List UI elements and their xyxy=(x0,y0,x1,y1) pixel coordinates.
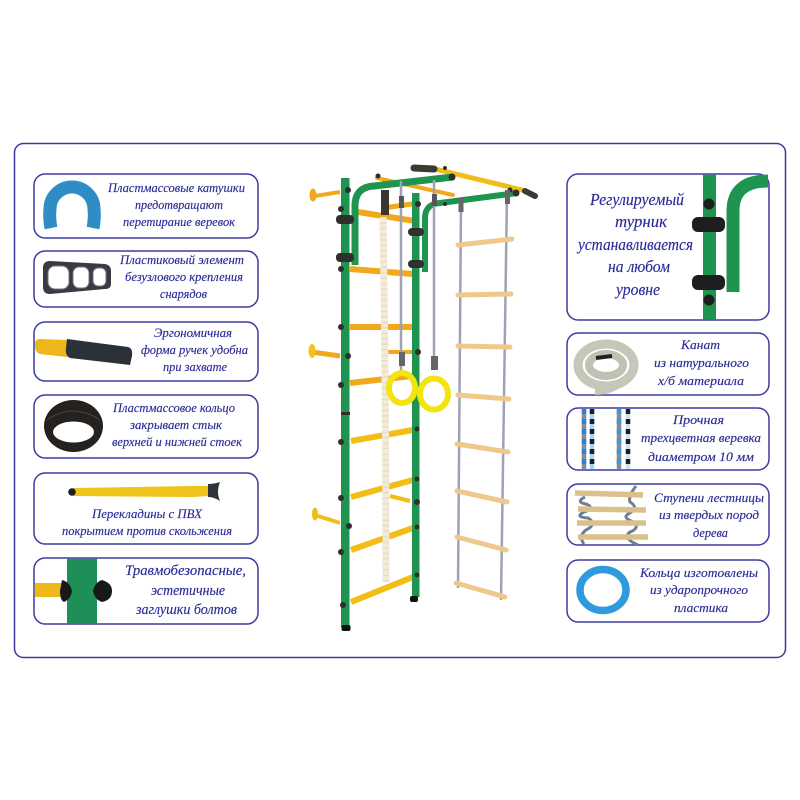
bolts and clamps xyxy=(336,166,520,608)
rungs xyxy=(350,212,415,602)
text: three-colour cord: Прочная xyxy=(672,412,724,427)
text: knotless fastening: безузлового крепления xyxy=(125,269,243,284)
panel: impact-resistant rings xyxy=(567,560,769,622)
text: joint ring: закрывает стык xyxy=(129,417,223,432)
outer frame xyxy=(14,144,786,658)
main illustration: wall bars xyxy=(308,166,535,631)
panel: adjustable pull-up bar xyxy=(567,174,769,320)
text: ergonomic handles: при захвате xyxy=(163,359,227,374)
text: hardwood steps: из твердых пород xyxy=(659,507,759,522)
text: impact-resistant rings: из ударопрочного xyxy=(650,582,748,597)
text: ergonomic handles: Эргономичная xyxy=(154,325,232,340)
text: hardwood steps: дерева xyxy=(693,525,728,540)
text: cotton rope: х/б материала xyxy=(657,373,745,388)
text: adjustable pull-up bar: Регулируемый xyxy=(589,190,684,209)
panel: knotless fastening element xyxy=(34,251,258,307)
icon: green post with bolt caps xyxy=(35,559,112,623)
upper yellow bars xyxy=(377,168,535,207)
panel: plastic spools xyxy=(34,174,258,238)
icon: green post with bracket and clamps xyxy=(692,175,768,319)
icon: braided cords xyxy=(584,409,628,469)
text: impact-resistant rings: Кольца изготовлены xyxy=(639,565,758,580)
text: bolt caps: эстетичные xyxy=(151,583,225,599)
panel: cotton rope xyxy=(567,333,769,395)
text: impact-resistant rings: пластика xyxy=(674,600,729,615)
panel: bolt caps xyxy=(34,558,258,624)
panel: three-colour cord xyxy=(567,408,769,470)
wall pegs xyxy=(308,188,340,523)
text: cotton rope: из натурального xyxy=(654,355,750,370)
text: three-colour cord: диаметром 10 мм xyxy=(648,449,754,464)
text: ergonomic handles: форма ручек удобна xyxy=(141,342,248,357)
icon: blue ring xyxy=(580,570,626,610)
icon: three-hole plastic element xyxy=(43,261,111,294)
text: plastic spools: Пластмассовые катушки xyxy=(107,180,245,195)
text: plastic spools: перетирание веревок xyxy=(123,214,236,229)
gymnastic rings xyxy=(389,180,448,410)
text: knotless fastening: Пластиковый элемент xyxy=(119,252,244,267)
green posts and pull-up brackets xyxy=(341,177,517,627)
icon: coiled rope xyxy=(578,344,634,392)
icon: black plastic ring xyxy=(44,400,103,452)
icon: black handle on yellow tube xyxy=(35,339,132,365)
text: adjustable pull-up bar: устанавливается xyxy=(576,235,693,254)
text: adjustable pull-up bar: на любом xyxy=(608,257,670,276)
text: bolt caps: Травмобезопасные, xyxy=(125,563,246,579)
panel: plastic joint ring xyxy=(34,395,258,458)
text: adjustable pull-up bar: турник xyxy=(615,212,668,231)
text: PVC rungs: покрытием против скольжения xyxy=(62,523,232,538)
icon: blue spool xyxy=(50,187,94,228)
text: joint ring: верхней и нижней стоек xyxy=(112,434,243,449)
text: PVC rungs: Перекладины с ПВХ xyxy=(91,506,203,521)
climbing rope xyxy=(381,190,389,582)
text: three-colour cord: трехцветная веревка xyxy=(641,430,762,445)
icon: ladder steps xyxy=(575,486,648,545)
text: bolt caps: заглушки болтов xyxy=(135,602,237,618)
icon: yellow crossbar xyxy=(68,482,220,501)
panel: PVC coated rungs xyxy=(34,473,258,544)
text: hardwood steps: Ступени лестницы xyxy=(654,490,764,505)
post caps xyxy=(342,596,418,631)
text: cotton rope: Канат xyxy=(680,337,720,352)
rope ladder xyxy=(456,190,512,600)
text: adjustable pull-up bar: уровне xyxy=(614,280,660,299)
text: plastic spools: предотвращают xyxy=(135,197,223,212)
text: joint ring: Пластмассовое кольцо xyxy=(112,400,235,415)
panel: hardwood ladder steps xyxy=(567,484,769,545)
panel: ergonomic handles xyxy=(34,322,258,381)
text: knotless fastening: снарядов xyxy=(160,286,207,301)
